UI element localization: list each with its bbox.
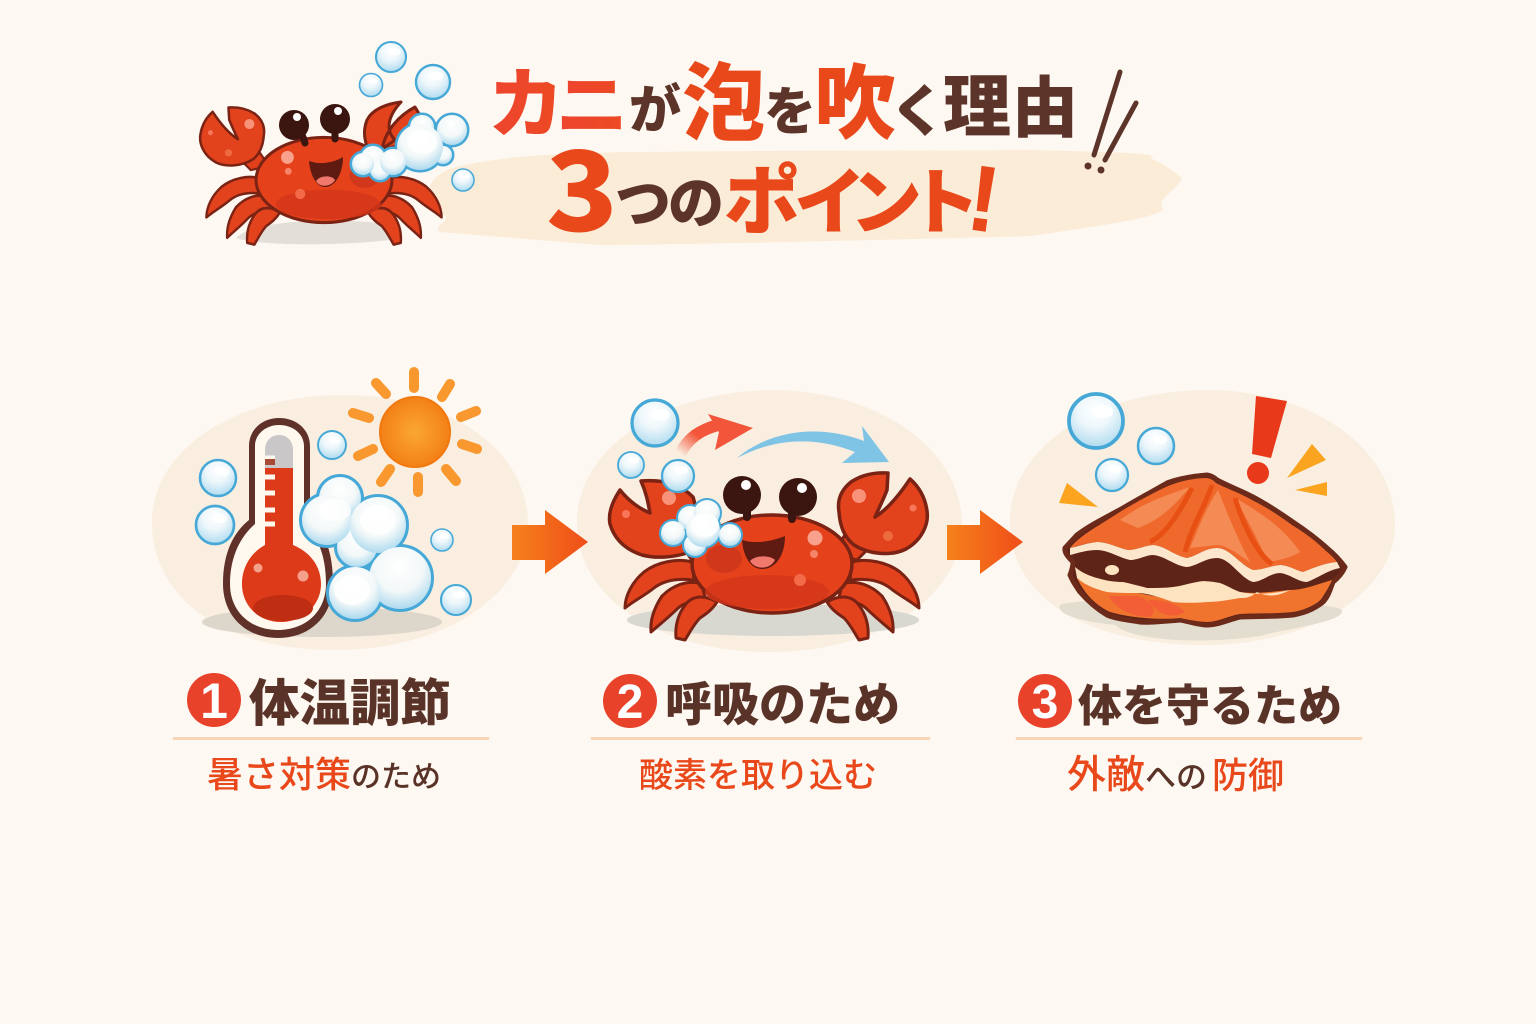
- crab legs: [206, 177, 442, 245]
- arrow 2: [947, 510, 1023, 574]
- crab eyes: [723, 476, 817, 519]
- number badge 1: 1: [200, 673, 228, 729]
- rising bubbles: [360, 42, 474, 191]
- crab body: [256, 137, 392, 223]
- upper cream lip: [1070, 542, 1340, 582]
- title line 1: 由: [1012, 71, 1078, 145]
- crab claw right: [365, 102, 424, 156]
- number badge 3: [1018, 674, 1072, 729]
- title line 2: !: [961, 144, 1007, 253]
- title line 1: [488, 57, 1078, 151]
- title line 1: を: [764, 84, 816, 142]
- title line 2: イ: [794, 164, 866, 244]
- title line 2: ト: [908, 164, 980, 244]
- decorative double exclamation: [1085, 72, 1136, 173]
- icon: sun: [353, 372, 477, 492]
- point 3 label: [1018, 674, 1342, 797]
- crab shadow: [236, 221, 400, 244]
- bubbles around: [196, 431, 471, 615]
- title line 2: 3: [546, 107, 618, 263]
- heading 3: 体を守るため: [1078, 682, 1342, 731]
- shell ribs: [1120, 487, 1300, 562]
- foam: [352, 115, 467, 180]
- crab claw left: [609, 481, 710, 572]
- panel 1: body temperature illustration: [152, 372, 528, 650]
- crab legs: [625, 560, 919, 640]
- shell outline and mouth: [1065, 475, 1345, 625]
- crab body: [692, 515, 852, 613]
- title line 1: 泡: [682, 57, 766, 151]
- lower shell colour patches: [1108, 596, 1185, 617]
- icon: thermometer: [223, 418, 333, 638]
- panel blob: [1010, 390, 1395, 645]
- crab claw left: [200, 107, 269, 170]
- underline 1: [174, 737, 488, 740]
- title line 1: カ: [488, 63, 564, 148]
- heading 1: 体温調節: [249, 675, 451, 732]
- title line 2: の: [668, 172, 724, 235]
- number badge 1: [187, 673, 241, 729]
- crab mouth: [742, 536, 785, 569]
- panel 2: breathing illustration: [577, 390, 962, 652]
- number badge 2: [603, 674, 657, 729]
- title line 1: 吹: [814, 59, 896, 150]
- arrow: red inhale: [680, 414, 753, 454]
- arrow: blue exhale: [737, 426, 889, 463]
- title line 2: ポ: [724, 160, 800, 245]
- panel blob: [577, 390, 962, 652]
- foam: [661, 500, 741, 556]
- panel blob: [152, 395, 528, 650]
- title line 1: ニ: [556, 67, 628, 147]
- lower cream lip: [1075, 567, 1290, 603]
- upper shell: [1070, 478, 1337, 572]
- foam cluster: [302, 477, 431, 619]
- alert sparks: [1059, 444, 1327, 507]
- ground shadow: [202, 607, 442, 637]
- hero crab with bubbles: [200, 42, 474, 245]
- number badge 3: 3: [1032, 676, 1058, 729]
- bubbles: [618, 400, 694, 492]
- ground shadow: [1059, 599, 1342, 640]
- title line 2: [546, 107, 1007, 263]
- title banner: brush stroke: [429, 150, 1182, 245]
- subtitle 2: 酸素を取り込む: [639, 757, 877, 795]
- icon: clam: [1065, 475, 1345, 625]
- title line 2: ン: [850, 164, 922, 244]
- crab claw right: [832, 473, 927, 560]
- subtitle 1: 暑さ対策のため: [207, 754, 441, 795]
- title line 1: が: [629, 81, 681, 140]
- lower shell: [1077, 578, 1332, 622]
- title line 2: つ: [615, 172, 671, 235]
- crab eyes: [279, 104, 350, 143]
- title line 1: く: [890, 80, 946, 143]
- arrow 1: [512, 510, 588, 574]
- underline 3: [1017, 737, 1361, 740]
- icon: exclamation mark: [1247, 396, 1287, 484]
- number badge 2: 2: [617, 676, 643, 729]
- heading 2: 呼吸のため: [665, 678, 900, 731]
- ground shadow: [627, 604, 919, 636]
- panel 3: protection illustration: [1010, 390, 1395, 645]
- point 1 label: [187, 673, 451, 795]
- crab mouth: [309, 157, 343, 187]
- subtitle 3: 外敵への防御: [1067, 754, 1284, 797]
- title line 1: 理: [943, 70, 1011, 146]
- underline 2: [592, 737, 929, 740]
- bubbles: [1069, 394, 1174, 491]
- point 2 label: [603, 674, 900, 795]
